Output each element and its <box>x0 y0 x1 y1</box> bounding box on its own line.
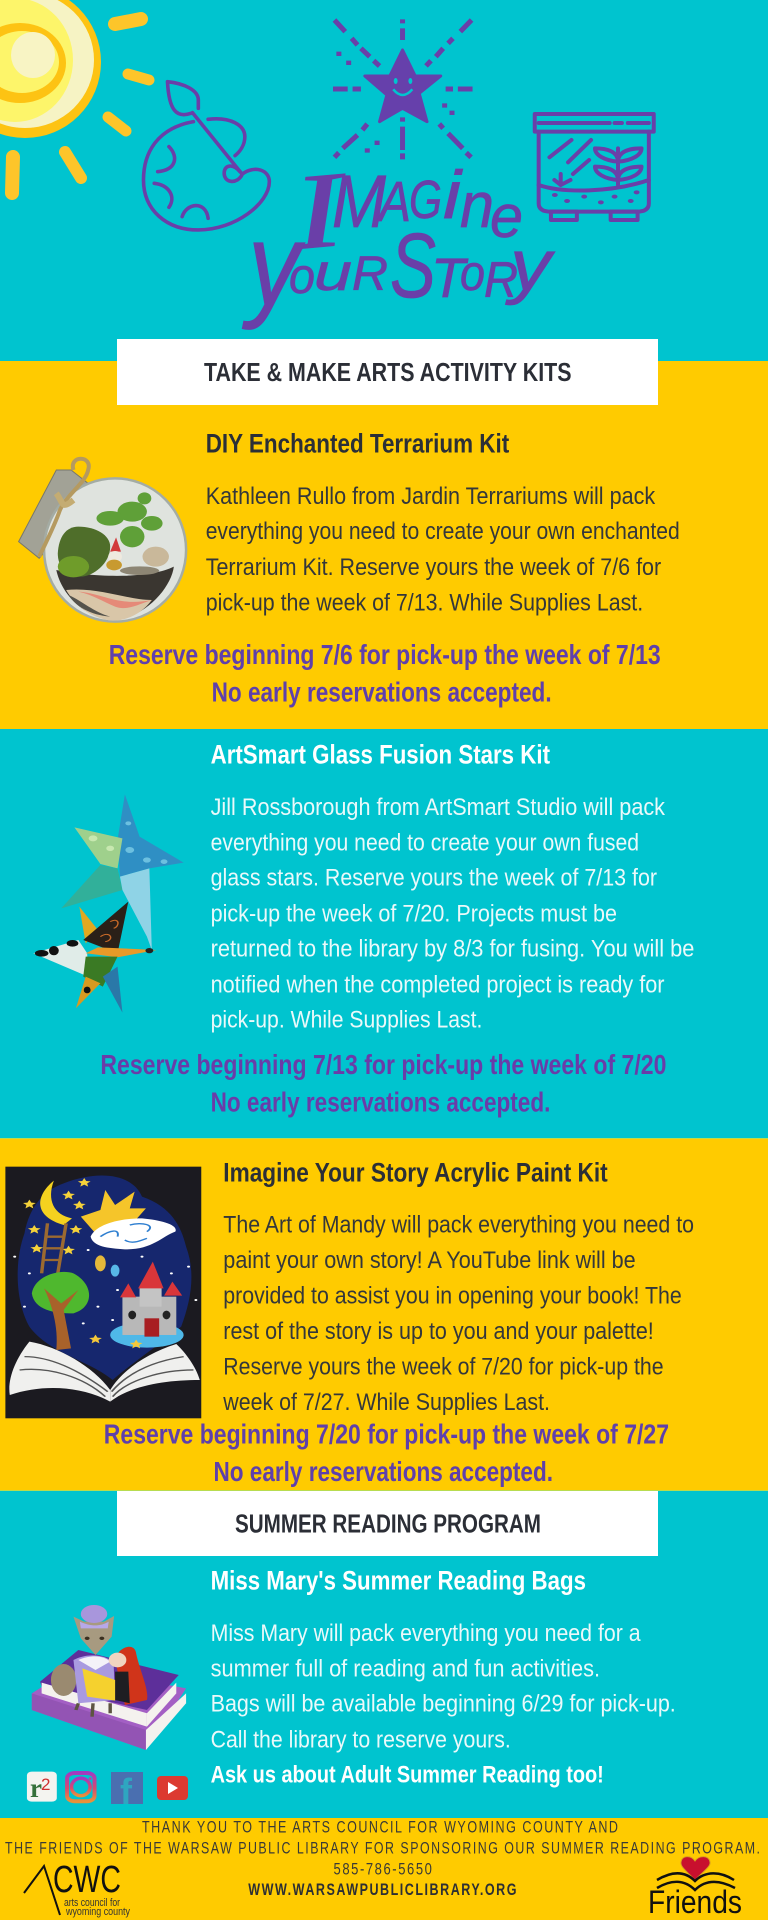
text block: acrylic paint description: rest of the story is up to you and your palette! <box>223 1318 654 1345</box>
icon: smiling star with rays <box>333 19 473 159</box>
label: r squared mark: r <box>30 1773 42 1803</box>
text block: terrarium description <box>206 483 680 617</box>
title: Imagine Your Story: R <box>352 248 388 301</box>
title: Imagine Your Story: o <box>289 248 315 304</box>
title: Imagine Your Story: A <box>376 170 411 234</box>
title: Imagine Your Story: i <box>443 157 463 233</box>
title: Imagine Your Story: I <box>286 150 354 273</box>
title: Imagine Your Story: M <box>332 160 386 243</box>
heading banner: summer reading program <box>117 1491 658 1556</box>
callout: acrylic paint reservation dates <box>104 1419 669 1487</box>
text block: summer reading bags description: Bags will be available beginning 6/29 for pick-up. <box>211 1691 676 1718</box>
icon: paint palette <box>143 82 269 230</box>
text block: glass stars description: Jill Rossborough from ArtSmart Studio will pack <box>211 794 666 821</box>
panel: glass stars kit background <box>0 729 768 1139</box>
icon: terrarium <box>535 114 654 220</box>
image: fused glass stars <box>33 794 184 1013</box>
icon: instagram <box>67 1773 95 1801</box>
panel: acrylic paint kit background <box>0 1139 768 1490</box>
icon: r squared app <box>27 1772 57 1802</box>
panel: summer reading background <box>0 1490 768 1818</box>
heading banner: take and make <box>117 339 658 405</box>
text block: acrylic paint description: Reserve yours the week of 7/20 for pick-up the <box>223 1353 664 1380</box>
logo: arts council for wyoming county: wyoming county <box>65 1906 130 1918</box>
logo: friends of the library <box>648 1857 742 1920</box>
image: terrarium jar <box>19 459 186 622</box>
title: Imagine Your Story: e <box>490 183 523 250</box>
title: Imagine Your Story: o <box>460 245 485 301</box>
title: Imagine Your Story: n <box>460 169 494 241</box>
panel: terrarium kit background <box>0 361 768 729</box>
heading: Miss Mary's Summer Reading Bags: Miss Mary's Summer Reading Bags <box>211 1565 586 1595</box>
text block: terrarium description: everything you need to create your own enchanted <box>206 518 680 545</box>
text block: glass stars description: glass stars. Reserve yours the week of 7/13 for <box>211 865 657 892</box>
heading: Imagine Your Story Acrylic Paint Kit: Imagine Your Story Acrylic Paint Kit <box>223 1157 608 1187</box>
text block: acrylic paint description: provided to assist you in opening your book! The <box>223 1282 682 1309</box>
callout: glass stars reservation dates <box>100 1049 666 1117</box>
heading: ArtSmart Glass Fusion Stars Kit: ArtSmart Glass Fusion Stars Kit <box>211 739 550 769</box>
icon: facebook <box>111 1771 143 1812</box>
text block: footer sponsors and contact: THANK YOU TO THE ARTS COUNCIL FOR WYOMING COUNTY AND <box>142 1818 620 1836</box>
title: Imagine Your Story: y <box>242 199 305 331</box>
heading banner: take and make: TAKE & MAKE ARTS ACTIVITY KITS <box>204 359 572 387</box>
title: Imagine Your Story: G <box>409 170 442 230</box>
text block: footer sponsors and contact <box>5 1818 762 1899</box>
icon: youtube <box>157 1776 188 1800</box>
callout: terrarium reservation dates <box>109 639 661 708</box>
image: wolf and red riding hood on books <box>32 1605 186 1750</box>
title: Imagine Your Story: u <box>314 244 352 302</box>
logo: arts council for wyoming county <box>24 1859 130 1918</box>
label: r squared mark <box>30 1773 50 1803</box>
text block: summer reading bags description: Miss Mary will pack everything you need for a <box>211 1620 641 1647</box>
text block: glass stars description: everything you need to create your own fused <box>211 829 639 856</box>
text block: glass stars description: returned to the library by 8/3 for fusing. You will be <box>211 936 694 963</box>
logo: arts council for wyoming county: CWC <box>53 1859 121 1901</box>
callout: acrylic paint reservation dates: No early reservations accepted. <box>214 1456 553 1487</box>
title: Imagine Your Story: y <box>504 226 556 306</box>
heading banner: summer reading program: SUMMER READING PROGRAM <box>235 1511 541 1539</box>
text block: summer reading bags description <box>211 1620 676 1789</box>
title: Imagine Your Story <box>242 150 556 331</box>
title: Imagine Your Story: S <box>390 215 436 317</box>
callout: terrarium reservation dates: Reserve beginning 7/6 for pick-up the week of 7/13 <box>109 639 661 670</box>
heading: DIY Enchanted Terrarium Kit: DIY Enchanted Terrarium Kit <box>206 429 509 459</box>
text block: summer reading bags description: Call the library to reserve yours. <box>211 1726 511 1753</box>
logo: arts council for wyoming county: arts council for <box>64 1897 120 1909</box>
text block: acrylic paint description: week of 7/27. While Supplies Last. <box>222 1389 550 1416</box>
text block: summer reading bags description: Ask us about Adult Summer Reading too! <box>211 1762 604 1789</box>
callout: glass stars reservation dates: No early reservations accepted. <box>211 1086 550 1117</box>
text block: terrarium description: Terrarium Kit. Reserve yours the week of 7/6 for <box>206 554 661 581</box>
text block: glass stars description: notified when the completed project is ready for <box>211 971 664 998</box>
text block: glass stars description <box>211 794 694 1034</box>
text block: terrarium description: pick-up the week of 7/13. While Supplies Last. <box>206 590 643 617</box>
text block: acrylic paint description: paint your own story! A YouTube link will be <box>223 1247 636 1274</box>
text block: glass stars description: pick-up. While Supplies Last. <box>211 1007 482 1034</box>
text block: footer sponsors and contact: WWW.WARSAWPUBLICLIBRARY.ORG <box>248 1881 518 1899</box>
callout: glass stars reservation dates: Reserve beginning 7/13 for pick-up the week of 7/20 <box>100 1049 666 1080</box>
panel: footer background <box>0 1818 768 1920</box>
text block: acrylic paint description <box>222 1212 694 1416</box>
panel: header background <box>0 0 768 361</box>
icon: facebook: f <box>120 1771 133 1812</box>
text block: footer sponsors and contact: 585-786-5650 <box>334 1860 434 1878</box>
logo: friends of the library: Friends <box>648 1884 742 1920</box>
title: Imagine Your Story: R <box>484 252 518 308</box>
title: Imagine Your Story: T <box>431 246 469 309</box>
image: storybook painting <box>5 1167 201 1418</box>
label: r squared mark: 2 <box>41 1775 50 1794</box>
text block: glass stars description: pick-up the week of 7/20. Projects must be <box>211 900 617 927</box>
text block: summer reading bags description: summer full of reading and fun activities. <box>211 1655 600 1682</box>
callout: terrarium reservation dates: No early reservations accepted. <box>212 677 552 708</box>
text block: acrylic paint description: The Art of Mandy will pack everything you need to <box>223 1212 694 1239</box>
text block: terrarium description: Kathleen Rullo from Jardin Terrariums will pack <box>206 483 656 510</box>
icon: sun <box>0 0 149 193</box>
